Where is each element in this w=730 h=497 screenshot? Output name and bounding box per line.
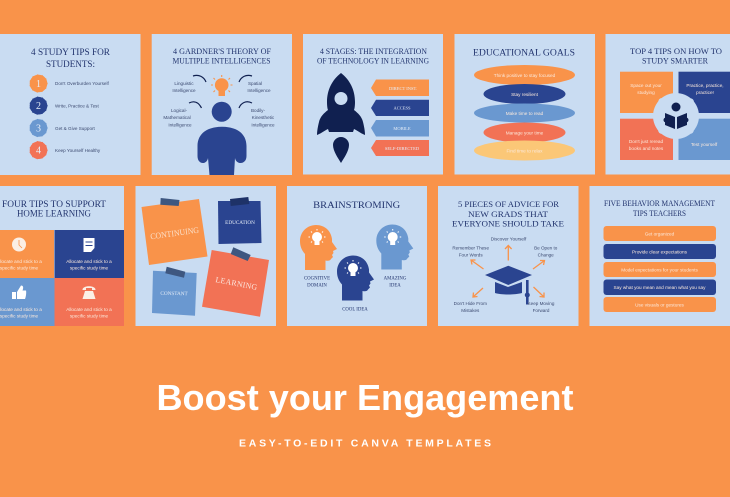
label: linguistic: Intelligence [172,88,196,93]
heading: 4 stages: 4 STAGES: THE INTEGRATION [320,47,427,56]
button 3 [604,262,716,277]
stage: access: ACCESS [393,106,411,111]
panel: brainstorming [287,186,427,326]
head: blue [376,224,413,270]
tip square: test yourself [678,119,730,160]
label: remember: Four Words [459,252,483,258]
button 5 [604,297,716,312]
heading: Gardner's theory: MULTIPLE INTELLIGENCES [172,56,270,66]
button 2 [604,244,716,259]
tile: telephone [54,278,124,326]
heading: brainstorming: BRAINSTROMING [313,201,400,211]
label: logical-mathematical: Logical- [171,108,188,113]
label: be open: Change [538,252,554,258]
tile: telephone: Allocate and stick to a [66,307,112,312]
note: continuing: CONTINUING [150,225,200,241]
heading: 4 study tips: 4 STUDY TIPS FOR [31,47,110,57]
heading: 5 pieces of advice: EVERYONE SHOULD TAKE [452,218,564,228]
icon: light bulb [211,75,232,96]
tip square: spaced studying [620,72,673,113]
button 4 [604,280,716,295]
tip square: practice: practice! [696,90,714,95]
tip square: notes: books and notes [629,146,664,151]
tip square: notes [620,119,673,160]
button 4: Say what you mean and mean what you say [614,285,706,290]
stage: mobile [371,120,429,136]
note: continuing [142,198,208,265]
heading: top 4 tips: TOP 4 TIPS ON HOW TO [630,47,722,56]
panel: five behavior management tips [590,186,730,326]
panel: sticky notes [136,186,276,326]
label: remember: Remember These [452,246,489,250]
heading: 5 pieces of advice: NEW GRADS THAT [468,209,549,219]
panel: 4 study tips [0,34,140,175]
head: navy [337,256,374,300]
goal 1: Think positive to stay focused [494,73,556,78]
label: discover yourself: Discover Yourself [491,236,527,242]
note: constant [152,267,197,316]
label: amazing idea: IDEA [389,284,401,288]
label: cool idea: COOL IDEA [342,308,368,312]
tip square: practice: Practice, practice, [686,83,724,88]
panel: top 4 tips [606,34,730,174]
heading: five behavior tips: FIVE BEHAVIOR MANAGEMENT [604,199,715,208]
goal 5: Find time to relax [507,148,543,154]
label: linguistic: Linguistic [174,81,194,86]
tip 1 text: Don't Overburden Yourself [55,81,109,86]
note: education [218,197,262,244]
note: constant: CONSTANT [160,291,189,297]
tip square: test yourself: Test yourself [691,142,718,147]
label: logical-mathematical: Mathematical [163,115,191,120]
goal 3 [474,104,575,122]
tip 4 text: Keep Yourself Healthy [55,148,101,153]
stage: direct instruction [371,80,429,96]
tile: notepad: specific study time [70,266,109,270]
tile: thumbs up [0,278,54,326]
label: cognitive domain: COGNITIVE [304,276,330,282]
label: bodily-kinesthetic: Kinesthetic [252,115,275,120]
tip 2 text: Write, Practice & Test [55,104,99,108]
tip 3 badge [30,119,47,137]
heading: five behavior tips: TIPS TEACHERS [633,209,686,218]
tip square: spaced studying: Space out your [630,83,662,88]
tip square: notes: Don't just reread [629,139,664,144]
tip 2 badge [30,97,47,114]
heading: educational goals: EDUCATIONAL GOALS [473,48,575,58]
panel: Gardner's theory [152,34,292,175]
icon: reader [664,102,688,129]
tip 2 badge: 2 [36,101,41,112]
stage: access [371,100,429,116]
label: bodily-kinesthetic: Intelligence [251,122,275,128]
tile: thumbs up: specific study time [0,314,39,318]
label: be open: Be Open to [534,246,558,250]
icon: graduation cap [485,266,532,304]
centre badge [653,93,699,139]
heading: four tips: FOUR TIPS TO SUPPORT [2,199,107,209]
label: logical-mathematical: Intelligence [168,122,192,128]
goal 1 [474,65,575,85]
button 2: Provide clear expectations [632,250,688,254]
icon: rocket [317,73,365,163]
heading: 4 stages: OF TECHNOLOGY IN LEARNING [317,56,429,66]
button 5: Use visuals or gestures [635,302,685,308]
label: cognitive domain: DOMAIN [307,284,327,288]
main title: Boost your Engagement [156,377,574,418]
goal 3: Make time to read [506,111,544,116]
heading: Gardner's theory: 4 GARDNER'S THEORY OF [173,47,272,56]
label: spatial: Spatial [248,81,262,86]
label: bodily-kinesthetic: Bodily- [251,108,265,113]
tile: notepad [54,230,124,278]
label: keep moving: Forward [533,308,550,313]
label: don't hide: Mistakes [461,308,480,313]
goal 4 [484,122,566,142]
note: learning [202,247,269,317]
stage: direct instruction: DIRECT INST. [389,86,417,91]
curved arrows [189,75,252,108]
tip square: spaced studying: studying [637,90,655,95]
label: spatial: Intelligence [247,88,271,93]
tile: notepad: Allocate and stick to a [66,259,112,264]
button 3: Model expectations for your students [621,268,698,272]
tile: telephone: specific study time [70,314,109,318]
goal 4: Manage your time [506,130,544,136]
panel: 4 stages [303,34,443,174]
button 1 [604,226,716,241]
stage: self-directed [371,140,429,156]
label: keep moving: Keep Moving [528,301,555,306]
person figure [198,102,246,175]
panel: educational goals [454,34,595,174]
stage: self-directed: SELF-DIRECTED [385,146,420,151]
subtitle: EASY-TO-EDIT CANVA TEMPLATES [239,438,491,450]
panel: 5 pieces of advice [438,186,578,326]
heading: four tips: HOME LEARNING [17,208,91,218]
goal 2 [484,84,566,104]
note: education: EDUCATION [225,220,255,226]
stage: mobile: MOBILE [393,126,411,131]
tip 3 badge: 3 [36,124,41,134]
goal 2: Stay resilient [511,92,539,97]
tip 1 badge: 1 [36,79,41,90]
tile: clock: specific study time [0,266,39,270]
note: learning: LEARNING [215,275,258,292]
tip square: practice [678,72,730,113]
goal 5 [474,140,575,160]
heading: top 4 tips: STUDY SMARTER [642,56,709,66]
heading: 4 study tips: STUDENTS: [46,59,95,69]
head: orange [300,225,337,270]
label: amazing idea: AMAZING [384,276,407,282]
panel: four tips home learning [0,186,124,326]
tile: clock [0,230,54,278]
tip 4 badge [30,141,47,159]
tip 3 text: Get & Give Support [55,126,96,131]
button 1: Get organized [645,232,675,236]
arrows [471,246,544,297]
heading: 5 pieces of advice: 5 PIECES OF ADVICE FOR [458,199,559,209]
label: don't hide: Don't Hide From [454,301,487,306]
tip 1 badge [30,75,47,92]
tip 4 badge: 4 [36,146,41,157]
